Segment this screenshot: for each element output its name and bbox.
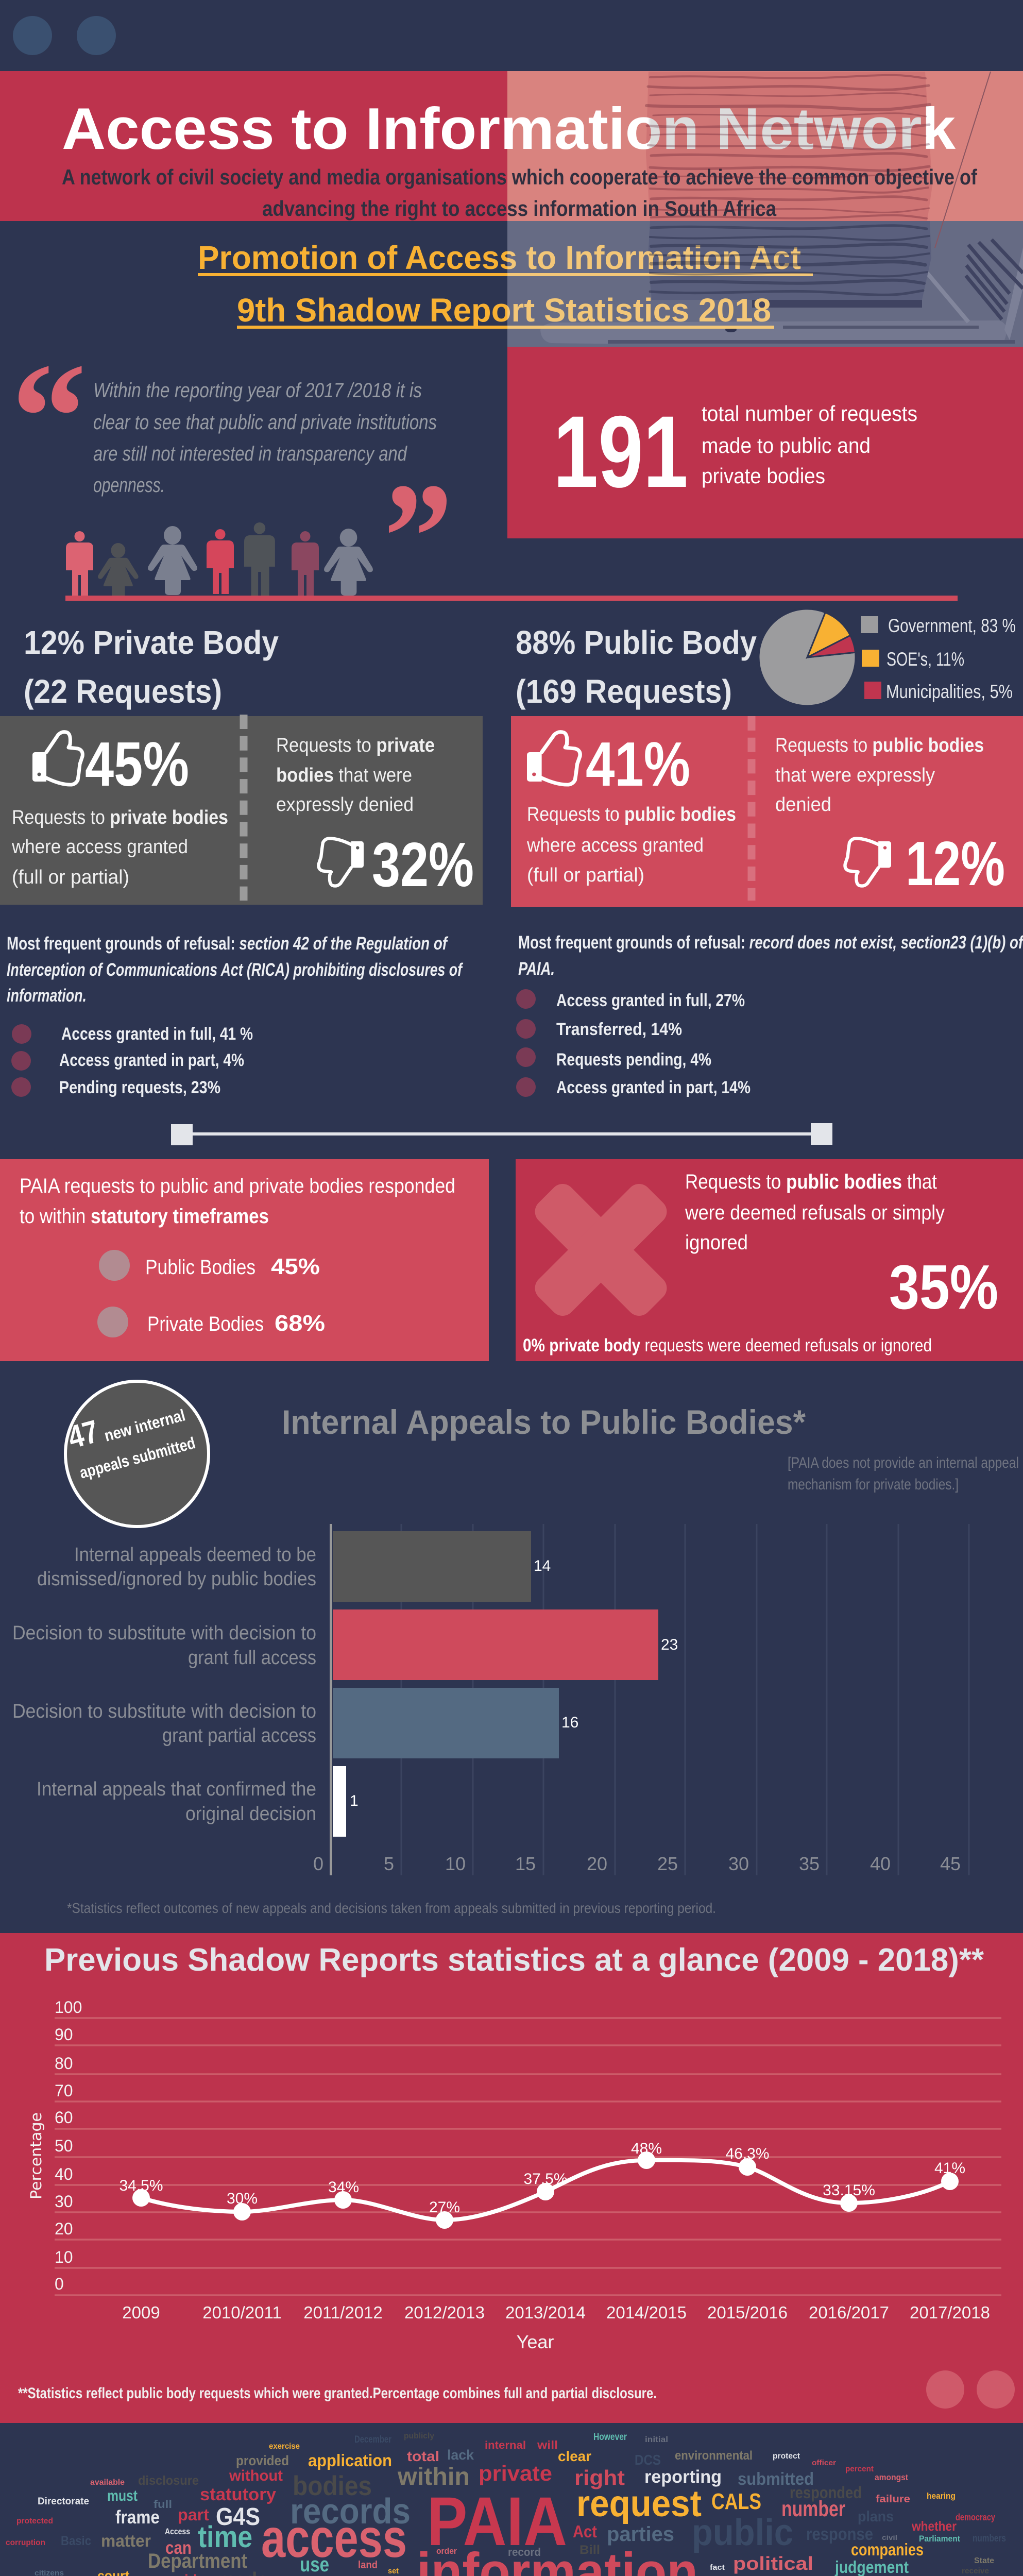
word cloud: provided	[236, 2453, 289, 2468]
text: expressly denied: Requests to public bodies	[775, 735, 984, 756]
icon: closing quote mark: ”	[384, 451, 453, 622]
word cloud: protected	[16, 2517, 53, 2526]
x axis labels: 2016/2017	[809, 2303, 889, 2322]
text: access granted	[526, 804, 736, 886]
word cloud: numbers	[973, 2533, 1006, 2544]
icon: thumbs down	[845, 838, 891, 886]
bar values: 23	[661, 1636, 678, 1653]
quote text: openness.	[93, 474, 165, 497]
axis labels: 5	[384, 1853, 394, 1874]
y axis labels: 10	[55, 2248, 73, 2266]
line chart	[27, 1998, 1001, 2352]
badge: 47 new internal appeals	[64, 1381, 209, 1527]
text: private body refusal grounds: Interception of Communications Act (RICA) prohibiting disclosures of	[7, 960, 464, 980]
pie legend: SOE's, 11%	[886, 649, 964, 670]
heading: Previous Shadow Reports statistics at a glance (2009 - 2018)**	[44, 1942, 984, 1978]
word cloud: can	[165, 2538, 192, 2558]
word cloud: G4S	[216, 2503, 260, 2531]
word cloud: Access	[165, 2527, 190, 2536]
text: access granted: where access granted	[526, 835, 704, 856]
word cloud: exercise	[269, 2442, 300, 2451]
text: expressly denied: denied	[775, 794, 831, 816]
category labels: grant partial access	[162, 1725, 316, 1747]
data labels: 33.15%	[823, 2182, 875, 2199]
text: expressly denied: that were expressly	[775, 765, 935, 786]
decorative circles top	[13, 16, 116, 55]
text: access granted	[11, 807, 228, 888]
text: public body refusal grounds: PAIA.	[518, 959, 555, 979]
list: public body outcomes	[516, 989, 751, 1097]
panel text: to within statutory timeframes	[20, 1205, 269, 1228]
people row	[65, 522, 958, 601]
y axis labels: 60	[55, 2108, 73, 2127]
y axis labels: 20	[55, 2219, 73, 2238]
footnote: **Statistics reflect public body requests which were granted.Percentage combines full and partial disclosure.	[18, 2385, 657, 2402]
y axis labels	[55, 1998, 82, 2293]
text: private body refusal grounds: Most frequent grounds of refusal: section 42 of the Regulation of	[7, 934, 449, 954]
data labels: 34%	[328, 2179, 359, 2196]
text: private body refusal grounds	[7, 934, 464, 1006]
text: access granted: where access granted	[11, 836, 188, 858]
word cloud: land	[358, 2560, 378, 2571]
axis labels: 20	[587, 1853, 607, 1874]
stat description	[702, 401, 917, 488]
divider	[171, 1123, 832, 1145]
word cloud: corruption	[6, 2538, 45, 2547]
x axis labels: 2013/2014	[505, 2303, 586, 2322]
word cloud: failure	[876, 2494, 910, 2505]
word cloud: Bill	[579, 2543, 600, 2557]
list: public body outcomes: Access granted in part, 14%	[556, 1078, 751, 1097]
word cloud: response	[806, 2524, 873, 2544]
word cloud: must	[107, 2487, 138, 2504]
stat: 32%: 32%	[372, 829, 474, 900]
word cloud: total	[407, 2448, 439, 2464]
text: access granted: Requests to public bodies	[527, 804, 736, 825]
x axis labels	[122, 2303, 990, 2322]
axis labels: 0	[313, 1853, 323, 1874]
word cloud: hearing	[927, 2491, 956, 2501]
word cloud: request	[576, 2483, 702, 2524]
text: access granted: Requests to private bodies	[12, 807, 228, 828]
word cloud: order	[436, 2546, 457, 2556]
report heading	[198, 239, 813, 329]
heading: private body	[24, 624, 279, 710]
quote text: Within the reporting year of 2017 /2018 it is	[93, 379, 422, 402]
category labels	[12, 1544, 316, 1825]
panel: public body stats	[511, 716, 1023, 907]
word cloud: Act	[573, 2522, 597, 2541]
icon: cross	[530, 1179, 672, 1321]
x axis title: Year	[517, 2331, 554, 2352]
icon: opening quote mark: “	[11, 331, 87, 502]
data labels: 30%	[227, 2190, 258, 2207]
category labels: Decision to substitute with decision to	[12, 1622, 316, 1644]
y axis labels: 100	[55, 1998, 82, 2016]
word cloud: use	[300, 2553, 329, 2576]
quote block	[11, 331, 453, 622]
y axis labels: 0	[55, 2275, 64, 2293]
word cloud: private	[479, 2461, 552, 2485]
word cloud: December	[354, 2434, 391, 2445]
bar values	[350, 1557, 678, 1809]
word cloud: reporting	[644, 2467, 722, 2487]
data labels: 34.5%	[119, 2177, 163, 2194]
y axis title: Percentage	[27, 2112, 45, 2199]
public bodies row	[99, 1250, 320, 1281]
x axis labels: 2014/2015	[606, 2303, 687, 2322]
panel: private body stats	[0, 715, 483, 905]
word cloud: statutory	[200, 2485, 276, 2504]
note: PAIA private bodies	[788, 1454, 1019, 1493]
report heading: Promotion of Access to Information Act	[198, 239, 801, 276]
stat: 35%: 35%	[889, 1252, 998, 1322]
word cloud: right	[574, 2466, 625, 2489]
footnote: appeals: *Statistics reflect outcomes of new appeals and decisions taken from appeals submitted in previous reporting period.	[67, 1900, 716, 1916]
bar values: 14	[534, 1557, 551, 1574]
category labels: original decision	[185, 1803, 316, 1825]
word cloud: DCS	[635, 2452, 661, 2468]
y axis labels: 90	[55, 2025, 73, 2044]
panel: previous shadow reports	[0, 1933, 1023, 2423]
bar: dismissed	[333, 1531, 531, 1602]
x axis labels: 2015/2016	[707, 2303, 788, 2322]
private bodies row: 68%	[275, 1311, 325, 1336]
word cloud: plans	[858, 2509, 894, 2525]
heading: public body: 88% Public Body	[516, 624, 757, 661]
word cloud: submitted	[738, 2469, 814, 2489]
data line	[141, 2160, 950, 2220]
word cloud: whether	[911, 2518, 957, 2534]
text: private body refusal grounds: information.	[7, 986, 87, 1006]
quote text	[93, 379, 437, 497]
word cloud: access	[261, 2508, 407, 2569]
word cloud: environmental	[675, 2449, 753, 2463]
axis labels: 30	[728, 1853, 749, 1874]
data labels: 41%	[934, 2160, 965, 2177]
y axis labels: 70	[55, 2081, 73, 2100]
word cloud: set	[388, 2567, 399, 2575]
word cloud: disclosure	[138, 2473, 199, 2488]
word cloud: amongst	[875, 2472, 908, 2482]
word cloud: officer	[812, 2459, 836, 2467]
text: expressly denied	[276, 735, 435, 816]
panel text: PAIA requests to public and private bodies responded	[20, 1175, 455, 1197]
list: public body outcomes: Transferred, 14%	[556, 1020, 682, 1039]
word cloud: time	[198, 2520, 252, 2554]
list: private body outcomes: Access granted in part, 4%	[59, 1050, 244, 1070]
bar values: 16	[561, 1714, 578, 1731]
category labels: Decision to substitute with decision to	[12, 1701, 316, 1722]
pie legend	[861, 615, 1016, 702]
word cloud: CALS	[711, 2489, 761, 2514]
heading: public body: (169 Requests)	[516, 673, 732, 710]
panel text	[20, 1175, 455, 1228]
word cloud: internal	[485, 2439, 526, 2451]
word cloud: full	[154, 2498, 172, 2511]
word cloud: matter	[101, 2531, 151, 2550]
icon: thumbs up	[527, 732, 580, 785]
badge: 47 new internal appeals: new internal	[102, 1405, 187, 1445]
word cloud: number	[781, 2497, 845, 2521]
subtitle	[62, 165, 978, 221]
panel text: were deemed refusals or simply	[685, 1201, 945, 1224]
subtitle: advancing the right to access information in South Africa	[262, 196, 777, 221]
photo: stack of papers on a laptop (base)	[540, 72, 1023, 344]
heading: public body	[516, 624, 757, 710]
word cloud: publicly	[404, 2432, 434, 2441]
word cloud: records	[290, 2491, 411, 2531]
word cloud: record	[508, 2546, 541, 2558]
word cloud: fact	[710, 2563, 725, 2572]
heading: private body: 12% Private Body	[24, 624, 279, 661]
word cloud: responded	[790, 2483, 862, 2502]
data labels: 37.5%	[523, 2171, 568, 2188]
report heading: 9th Shadow Report Statistics 2018	[237, 292, 771, 329]
private bodies row: Private Bodies	[147, 1313, 264, 1335]
word cloud: application	[308, 2451, 392, 2470]
word cloud: Directorate	[38, 2496, 89, 2507]
header panel	[0, 71, 1023, 347]
list: private body outcomes	[11, 1024, 253, 1097]
x axis labels: 2017/2018	[910, 2303, 990, 2322]
text: expressly denied	[775, 735, 984, 816]
category labels: grant full access	[188, 1647, 316, 1669]
word cloud: bodies	[293, 2471, 372, 2501]
decorative circles	[926, 2370, 1015, 2409]
axis labels	[313, 1853, 961, 1874]
big number: 191	[553, 395, 688, 509]
word cloud: PAIA	[427, 2483, 567, 2560]
word cloud: percent	[845, 2465, 874, 2473]
text: expressly denied: bodies that were	[276, 765, 412, 786]
list: private body outcomes: Pending requests, 23%	[59, 1078, 220, 1097]
word cloud: available	[90, 2478, 125, 2487]
text: access granted: (full or partial)	[527, 865, 644, 886]
word cloud: democracy	[956, 2512, 995, 2522]
stat: 45%: 45%	[85, 729, 189, 799]
word cloud: However	[593, 2432, 627, 2443]
word cloud: frame	[115, 2506, 160, 2528]
stat description: total number of requests	[702, 401, 917, 426]
quote text: clear to see that public and private institutions	[93, 411, 437, 434]
panel text: Requests to public bodies that	[685, 1171, 937, 1193]
stat panel: 191 total requests	[507, 347, 1023, 538]
word cloud: receive	[962, 2567, 989, 2575]
private bodies row	[97, 1307, 325, 1337]
y axis labels: 40	[55, 2165, 73, 2183]
x axis labels: 2012/2013	[404, 2303, 485, 2322]
word cloud: judgement	[834, 2557, 909, 2576]
text: expressly denied: expressly denied	[276, 794, 414, 816]
bar: confirmed	[333, 1766, 346, 1837]
word cloud: Parliament	[919, 2534, 960, 2544]
word cloud: clear	[558, 2448, 591, 2464]
data points	[132, 2151, 959, 2229]
word cloud: without	[229, 2467, 283, 2484]
word cloud: companies	[851, 2540, 924, 2559]
badge: 47 new internal appeals: 47	[64, 1414, 103, 1456]
panel: statutory timeframes	[0, 1159, 489, 1361]
photo texture over text	[646, 75, 930, 218]
word cloud: will	[537, 2438, 558, 2451]
word cloud: lack	[447, 2447, 474, 2463]
public bodies row: Public Bodies	[145, 1256, 255, 1279]
axis labels: 10	[445, 1853, 466, 1874]
note: PAIA private bodies: mechanism for private bodies.]	[788, 1476, 959, 1493]
word cloud: initial	[645, 2435, 668, 2444]
x axis labels: 2010/2011	[202, 2303, 282, 2322]
axis labels: 40	[870, 1853, 891, 1874]
x axis labels: 2009	[122, 2303, 160, 2322]
axis labels: 25	[657, 1853, 678, 1874]
bar: partial access	[333, 1688, 559, 1758]
quote text: are still not interested in transparency and	[93, 443, 407, 465]
badge: 47 new internal appeals: appeals submitted	[77, 1433, 197, 1482]
y axis labels: 30	[55, 2192, 73, 2211]
y axis labels: 50	[55, 2137, 73, 2155]
word cloud: Basic	[61, 2534, 91, 2548]
data labels: 48%	[631, 2140, 662, 2157]
word cloud: Department	[148, 2550, 247, 2572]
bar: full access	[333, 1609, 658, 1680]
stat description: private bodies	[702, 464, 825, 488]
text: access granted: (full or partial)	[12, 867, 129, 888]
word cloud: State	[974, 2556, 994, 2565]
icon: thumbs up	[32, 732, 82, 785]
word cloud	[6, 2432, 1006, 2576]
category labels: Internal appeals deemed to be	[74, 1544, 316, 1566]
pie chart: public body types	[759, 609, 856, 706]
axis labels: 35	[799, 1853, 820, 1874]
public bodies row: 45%	[271, 1254, 320, 1279]
heading: private body: (22 Requests)	[24, 673, 222, 710]
word cloud: civil	[882, 2533, 897, 2541]
axis labels: 15	[515, 1853, 536, 1874]
panel: deemed refusals	[516, 1159, 1023, 1361]
x axis labels: 2011/2012	[303, 2303, 383, 2322]
bar values: 1	[350, 1792, 359, 1809]
text: expressly denied: Requests to private	[276, 735, 435, 756]
text: public body refusal grounds	[518, 933, 1023, 979]
icon: thumbs down	[318, 838, 364, 886]
word cloud: public	[692, 2512, 793, 2553]
axis labels: 45	[940, 1853, 961, 1874]
stat description: made to public and	[702, 433, 871, 457]
note: 0% private body requests were deemed refusals or ignored	[523, 1335, 932, 1355]
word cloud: within	[397, 2463, 470, 2490]
category labels: Internal appeals that confirmed the	[37, 1778, 316, 1800]
category labels: dismissed/ignored by public bodies	[37, 1568, 316, 1590]
bar chart: internal appeals	[12, 1524, 969, 1875]
list: public body outcomes: Requests pending, 4%	[556, 1050, 711, 1070]
panel text	[685, 1171, 945, 1254]
stat: 41%: 41%	[586, 729, 690, 799]
list: private body outcomes: Access granted in full, 41 %	[61, 1024, 253, 1044]
data labels	[119, 2140, 965, 2216]
word cloud: parties	[607, 2523, 674, 2546]
panel text: ignored	[685, 1231, 748, 1254]
heading: internal appeals: Internal Appeals to Public Bodies*	[282, 1403, 806, 1441]
list: public body outcomes: Access granted in full, 27%	[556, 991, 745, 1010]
data labels: 27%	[429, 2199, 460, 2216]
word cloud: political	[733, 2553, 813, 2574]
title: Access to Information Network	[62, 96, 956, 162]
word cloud: protect	[773, 2452, 800, 2461]
data labels: 46.3%	[725, 2145, 770, 2162]
y axis labels: 80	[55, 2054, 73, 2073]
word cloud: part	[178, 2505, 209, 2524]
